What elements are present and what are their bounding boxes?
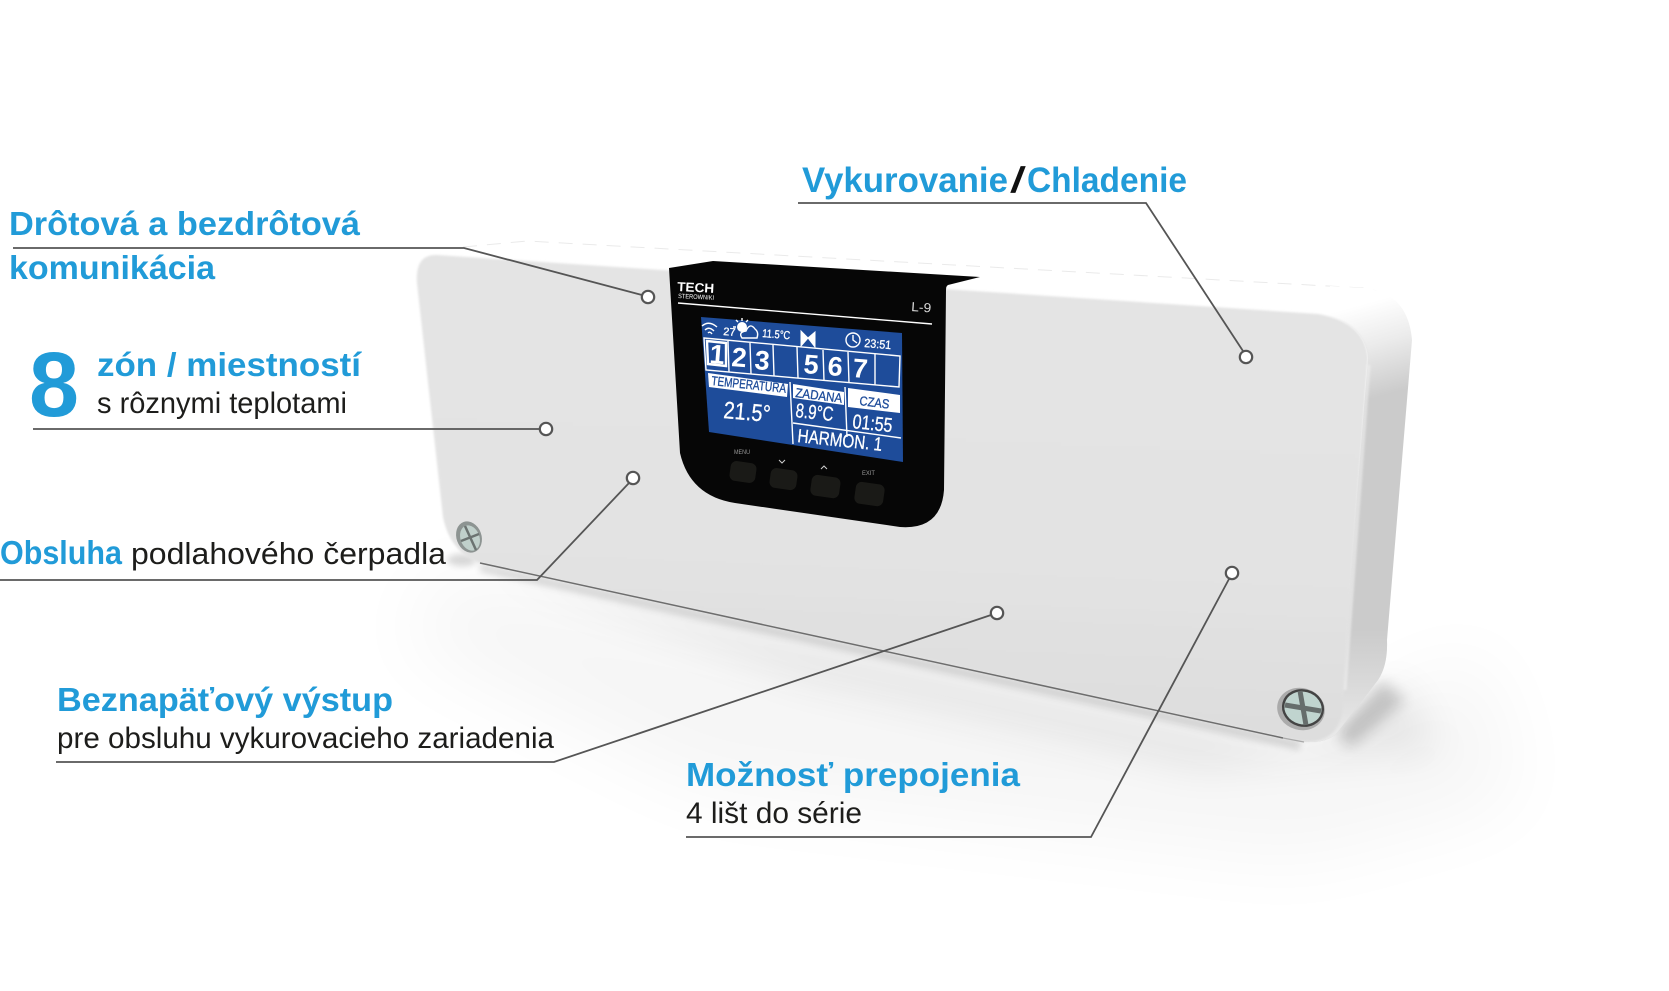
heading second line: komunikácia — [9, 250, 215, 287]
callout: series connection — [686, 567, 1238, 837]
highlight between front and side — [1345, 365, 1369, 690]
button labels: EXIT — [862, 471, 875, 477]
panel black housing — [669, 261, 980, 527]
active zone box — [707, 341, 726, 366]
body side wall — [1298, 286, 1412, 742]
zone numbers: 3 — [754, 345, 771, 376]
device body — [417, 241, 1412, 742]
description: podlahového čerpadla — [131, 536, 447, 571]
icon: right screw — [1272, 683, 1330, 735]
zone grid — [704, 338, 900, 387]
heading: Beznapäťový výstup — [57, 682, 393, 719]
logo: TECH: STEROWNIKI — [678, 293, 714, 302]
heading: slash: / — [1011, 161, 1025, 200]
leader line — [798, 203, 1243, 351]
heading: Obsluha — [0, 535, 122, 572]
icon: sun and cloud — [733, 318, 758, 338]
body bottom edge — [480, 563, 1304, 742]
set temperature readout: 8.9°C — [794, 400, 835, 426]
callout: 8 zones — [29, 334, 552, 436]
temperature readout — [708, 373, 788, 428]
heading: zón / miestností — [97, 347, 363, 384]
button labels: MENU — [734, 450, 750, 456]
leader dot — [1240, 351, 1252, 363]
outdoor temperature: 11.5°C — [762, 328, 791, 342]
set temperature readout: ZADANA — [795, 385, 843, 406]
callout: voltage-free output — [56, 607, 1003, 762]
screen dividers — [790, 382, 901, 444]
time readout: CZAS — [859, 393, 891, 412]
icon: clock — [846, 333, 860, 347]
time readout: 01:55 — [851, 411, 894, 437]
heading: Drôtová a bezdrôtová — [9, 206, 360, 243]
zone numbers: 2 — [731, 342, 748, 373]
device shadow — [400, 554, 1520, 860]
temperature readout: 21.5° — [722, 397, 772, 428]
leader dot — [627, 472, 639, 484]
callout: communication — [9, 206, 654, 303]
leader dot — [540, 423, 552, 435]
logo: TECH: TECH — [677, 279, 715, 296]
leader dot — [1226, 567, 1238, 579]
heading: Možnosť prepojenia — [686, 757, 1020, 794]
control panel — [669, 261, 980, 527]
callout: floor pump — [0, 472, 639, 580]
leader line — [56, 615, 991, 762]
zone numbers: 7 — [852, 353, 869, 384]
status time: 23:51 — [864, 336, 892, 352]
leader line — [686, 579, 1229, 837]
panel buttons — [729, 450, 885, 507]
callout: heating / cooling — [798, 161, 1252, 363]
time readout — [848, 388, 900, 437]
status temperature: 27 — [723, 326, 736, 339]
heading: cooling: Chladenie — [1027, 161, 1187, 200]
zone numbers — [709, 339, 869, 384]
description: pre obsluhu vykurovacieho zariadenia — [57, 722, 554, 755]
icon: left screw — [452, 518, 486, 556]
description: s rôznymi teplotami — [97, 387, 347, 420]
panel divider line — [678, 303, 932, 324]
icon: valve — [801, 331, 815, 347]
leader dot — [642, 291, 654, 303]
screen background — [701, 317, 903, 462]
icon: wifi — [702, 323, 717, 334]
model label: L-9 — [911, 299, 932, 315]
leader line — [0, 483, 629, 580]
set temperature readout — [793, 384, 844, 426]
leader dot — [991, 607, 1003, 619]
zone numbers: 1 — [709, 339, 726, 370]
big number: 8 — [29, 334, 79, 436]
leader line — [13, 248, 642, 295]
zone numbers: 6 — [827, 351, 844, 382]
body front face — [417, 255, 1368, 741]
screen — [701, 317, 903, 462]
temperature readout: TEMPERATURA — [711, 373, 787, 396]
schedule label: HARMON. 1 — [796, 426, 883, 456]
description: 4 lišt do série — [686, 797, 862, 830]
zone numbers: 5 — [803, 349, 820, 380]
heading: heating: Vykurovanie — [802, 161, 1008, 200]
top outline of the body — [463, 241, 1405, 320]
button labels — [734, 450, 875, 477]
leader line — [33, 428, 540, 430]
